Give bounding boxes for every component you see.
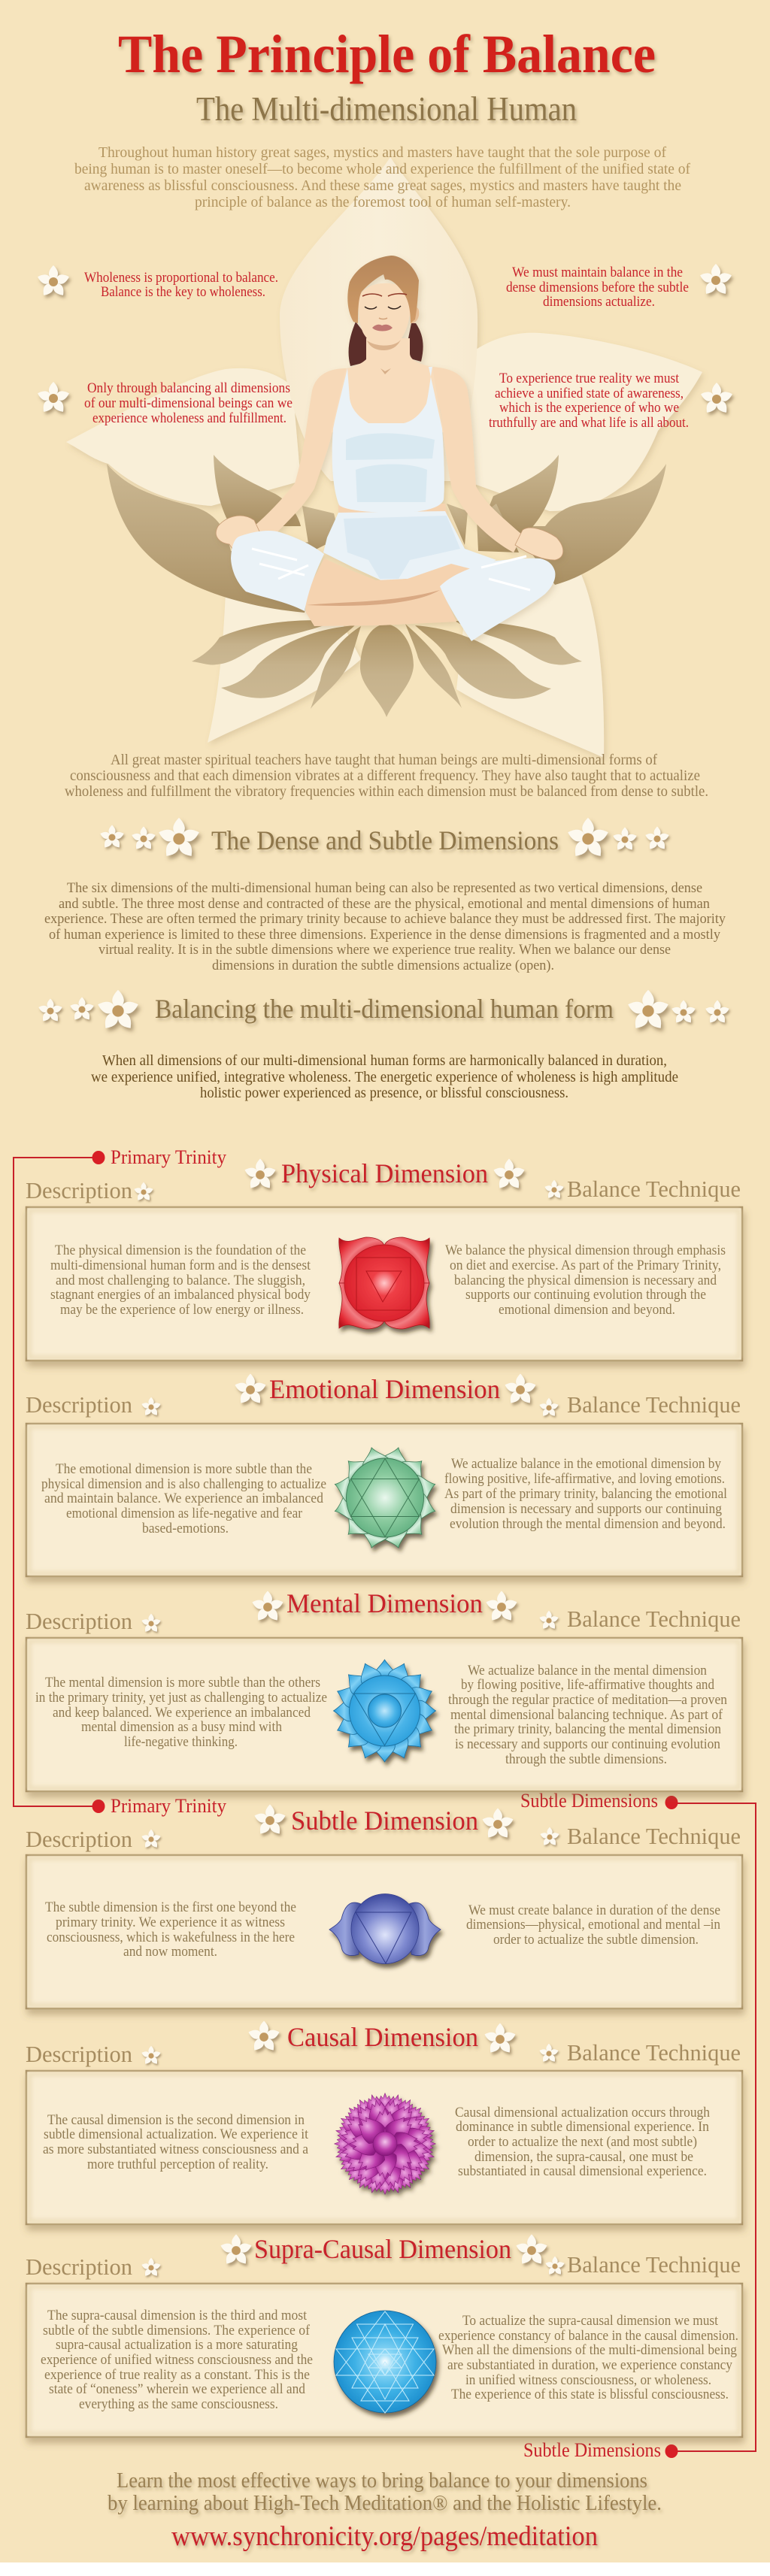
intro paragraph xyxy=(74,144,690,210)
description text: stagnant energies of an imbalanced physical body xyxy=(50,1288,311,1303)
intro paragraph: Throughout human history great sages, mystics and masters have taught that the sole purpose of xyxy=(99,144,666,161)
hands xyxy=(216,516,265,556)
box xyxy=(26,1424,742,1576)
icon: red root chakra xyxy=(339,1237,429,1329)
description text: state of “oneness” wherein we experience all and xyxy=(49,2382,306,2397)
balance technique label: Balance Technique xyxy=(567,1391,741,1418)
footer call to action: Learn the most effective ways to bring balance to your dimensions xyxy=(117,2469,647,2493)
technique text: supports our continuing evolution through the xyxy=(465,1288,706,1303)
paragraph: wholeness xyxy=(91,1053,678,1101)
description text xyxy=(41,2308,313,2412)
bracket: primary trinity: Primary Trinity xyxy=(111,1146,226,1168)
technique text xyxy=(448,1663,727,1767)
paragraph: six dimensions: of human experience is limited to these three dimensions. Experience in the dense dimensions is fragmented and a mostly xyxy=(49,927,720,943)
description text xyxy=(45,1900,296,1960)
heading: balancing with flowers: Balancing the multi-dimensional human form xyxy=(155,994,614,1024)
subtitle: The Multi-dimensional Human xyxy=(196,90,577,128)
technique text: by flowing positive, life-affirmative thoughts and xyxy=(461,1678,715,1693)
paragraph: six dimensions: The six dimensions of the multi-dimensional human being can also be represented as two vertical dimensions, dense xyxy=(67,880,702,896)
description label: Description xyxy=(26,1177,132,1203)
white legs xyxy=(231,531,324,611)
technique text xyxy=(455,2105,710,2179)
heading xyxy=(251,1588,518,1623)
technique text: We balance the physical dimension through emphasis xyxy=(445,1243,726,1258)
callout: maintain balance xyxy=(506,265,689,310)
technique text: Causal dimensional actualization occurs through xyxy=(455,2105,710,2120)
technique text: order to actualize the next (and most subtle) xyxy=(468,2135,697,2150)
bracket: primary trinity: Primary Trinity xyxy=(111,1795,226,1817)
paragraph: six dimensions xyxy=(44,880,726,973)
lower lotus petals xyxy=(192,620,582,717)
description text xyxy=(43,2113,309,2172)
footer call to action: by learning about High-Tech Meditation® and the Holistic Lifestyle. xyxy=(108,2491,662,2515)
balance technique label: Balance Technique xyxy=(567,1606,741,1632)
panel: causal dimension xyxy=(26,2021,742,2224)
icon: flower xyxy=(699,264,733,296)
dark lotus leaves behind figure xyxy=(107,455,666,613)
woman figure xyxy=(216,256,563,641)
technique text: dominance in subtle dimensional experience. In xyxy=(456,2120,709,2135)
box xyxy=(26,1207,742,1361)
technique text xyxy=(444,1457,727,1532)
technique text: dimension, the supra-causal, one must be xyxy=(474,2150,693,2165)
intro paragraph: awareness as blissful consciousness. And these same great sages, mystics and masters have taught the xyxy=(84,177,681,194)
heading: Emotional Dimension xyxy=(269,1374,500,1404)
description text: The causal dimension is the second dimension in xyxy=(47,2113,305,2128)
icon: magenta crown chakra xyxy=(334,2093,436,2195)
paragraph: six dimensions: virtual reality. It is in the subtle dimensions where we experience true reality. When we balance our dense xyxy=(99,942,671,958)
callout: true reality: achieve a unified state of awareness, xyxy=(495,386,684,401)
box xyxy=(26,2071,742,2224)
description text: experience of true reality as a constant. This is the xyxy=(44,2368,310,2383)
hair xyxy=(347,256,419,323)
technique text xyxy=(466,1903,720,1948)
icon: flower xyxy=(36,382,71,414)
technique text: We must create balance in duration of the dense xyxy=(468,1903,720,1918)
technique text xyxy=(438,2314,738,2402)
intro paragraph: principle of balance as the foremost tool of human self-mastery. xyxy=(195,194,571,210)
heading: dense and subtle with flowers xyxy=(99,818,670,859)
technique text: The experience of this state is blissful consciousness. xyxy=(451,2387,729,2402)
heading: Physical Dimension xyxy=(281,1158,488,1188)
box xyxy=(26,2284,742,2437)
callout: maintain balance: dimensions actualize. xyxy=(543,294,655,310)
icon: sri yantra xyxy=(334,2311,436,2413)
technique text: is necessary and supports our continuing evolution xyxy=(455,1737,720,1752)
description text: and most challenging to balance. The sluggish, xyxy=(56,1273,305,1288)
description text: subtle of the subtle dimensions. The experience of xyxy=(43,2323,311,2338)
paragraph: six dimensions: experience. These are often termed the primary trinity because to achieve balance they must be addressed first. The majority xyxy=(44,911,726,927)
description text: in the primary trinity, yet just as challenging to actualize xyxy=(35,1691,327,1706)
technique text: through the subtle dimensions. xyxy=(505,1752,667,1767)
description label: Description xyxy=(26,1608,132,1634)
description text: life-negative thinking. xyxy=(124,1735,238,1750)
callout: true reality xyxy=(489,371,689,431)
technique text: are substantiated in duration, we experience constancy xyxy=(447,2358,733,2373)
icon: indigo third eye chakra xyxy=(329,1894,441,1963)
box xyxy=(26,1855,742,2008)
description text: primary trinity. We experience it as witness xyxy=(56,1915,285,1930)
panel: subtle dimension xyxy=(26,1804,742,2008)
technique text: mental dimensional balancing technique. As part of xyxy=(450,1708,723,1723)
description text xyxy=(35,1675,327,1750)
description text: and maintain balance. We experience an imbalanced xyxy=(44,1491,324,1506)
heading xyxy=(247,2021,517,2055)
callout: maintain balance: dense dimensions before the subtle xyxy=(506,280,689,295)
description text: mental dimension as a busy mind with xyxy=(81,1720,282,1735)
technique text: order to actualize the subtle dimension. xyxy=(493,1933,699,1948)
paragraph: master teachers: All great master spiritual teachers have taught that human beings are multi-dimensional forms of xyxy=(111,752,657,768)
description text: physical dimension and is also challenging to actualize xyxy=(41,1477,326,1492)
technique text: We actualize balance in the mental dimension xyxy=(468,1663,707,1678)
technique text: the primary trinity, balancing the mental dimension xyxy=(454,1722,721,1737)
callout: wholeness xyxy=(84,270,278,300)
heading: Supra-Causal Dimension xyxy=(254,2234,511,2264)
description text: and keep balanced. We experience an imbalanced xyxy=(53,1706,311,1721)
icon: flower xyxy=(36,265,71,298)
box xyxy=(26,1638,742,1791)
heading: Mental Dimension xyxy=(286,1588,483,1618)
description text: and now moment. xyxy=(123,1945,217,1960)
callout: true reality: To experience true reality we must xyxy=(499,371,680,386)
description text: The physical dimension is the foundation of the xyxy=(55,1243,306,1258)
description text: The emotional dimension is more subtle than the xyxy=(56,1462,312,1477)
description text: emotional dimension as life-negative and fear xyxy=(66,1506,302,1521)
panel: physical dimension xyxy=(26,1158,742,1361)
paragraph: master teachers xyxy=(65,752,708,800)
paragraph: master teachers: consciousness and that each dimension vibrates at a different frequency. They have also taught that to actualize xyxy=(70,768,700,784)
callout: balancing all dimensions: experience wholeness and fulfillment. xyxy=(92,410,286,426)
description text: consciousness, which is wakefulness in the here xyxy=(47,1930,295,1945)
description text: experience of unified witness consciousness and the xyxy=(41,2353,313,2368)
technique text: through the regular practice of meditation—a proven xyxy=(448,1693,727,1708)
heading: balancing with flowers xyxy=(38,990,730,1031)
technique text: experience constancy of balance in the causal dimension. xyxy=(438,2329,738,2344)
description text: may be the experience of low energy or illness. xyxy=(60,1303,304,1318)
balance technique label: Balance Technique xyxy=(567,1823,741,1849)
callout: balancing all dimensions: of our multi-dimensional beings can we xyxy=(84,395,293,411)
description text: multi-dimensional human form and is the densest xyxy=(50,1258,311,1273)
callout: wholeness: Balance is the key to wholeness. xyxy=(101,284,265,300)
technique text: We actualize balance in the emotional dimension by xyxy=(451,1457,722,1472)
panel: emotional dimension xyxy=(26,1373,742,1576)
paragraph: wholeness: When all dimensions of our multi-dimensional human forms are harmonically balanced in duration, xyxy=(102,1053,667,1069)
footer call to action xyxy=(108,2469,662,2515)
heading: Causal Dimension xyxy=(287,2022,478,2052)
technique text: substantiated in causal dimensional experience. xyxy=(458,2164,707,2179)
description text: based-emotions. xyxy=(142,1521,229,1536)
technique text: dimension is necessary and supports our continuing xyxy=(450,1502,722,1517)
bracket: subtle dimensions xyxy=(520,1790,756,2461)
panel: supra-causal dimension xyxy=(26,2234,742,2437)
pants xyxy=(323,511,496,585)
description text xyxy=(41,1462,326,1536)
paragraph: six dimensions: and subtle. The three most dense and contracted of these are the physical, emotional and mental dimensions of human xyxy=(59,896,710,912)
technique text: flowing positive, life-affirmative, and loving emotions. xyxy=(444,1472,725,1487)
bracket: subtle dimensions: Subtle Dimensions xyxy=(523,2439,661,2461)
arms and chest xyxy=(254,368,350,545)
description label: Description xyxy=(26,1391,132,1418)
technique text: When all the dimensions of the multi-dimensional being xyxy=(442,2343,737,2358)
bracket: primary trinity xyxy=(14,1146,226,1817)
description text: as more substantiated witness consciousness and a xyxy=(43,2142,308,2157)
paragraph: wholeness: we experience unified, integrative wholeness. The energetic experience of wholeness is high amplitude xyxy=(91,1070,678,1085)
technique text: To actualize the supra-causal dimension we must xyxy=(462,2314,719,2329)
technique text: on diet and exercise. As part of the Primary Trinity, xyxy=(450,1258,721,1273)
face and neck xyxy=(359,283,411,348)
description text: The supra-causal dimension is the third and most xyxy=(47,2308,308,2323)
paragraph: master teachers: wholeness and fulfillment the vibratory frequencies within each dimension must be balanced from dense to subtle. xyxy=(65,784,708,800)
callout: wholeness: Wholeness is proportional to balance. xyxy=(84,270,278,286)
technique text: dimensions—physical, emotional and mental –in xyxy=(466,1918,720,1933)
paragraph: wholeness: holistic power experienced as presence, or blissful consciousness. xyxy=(200,1085,568,1101)
description text: The mental dimension is more subtle than the others xyxy=(45,1675,320,1691)
callout: balancing all dimensions xyxy=(84,380,293,426)
callout: maintain balance: We must maintain balance in the xyxy=(512,265,683,280)
description label: Description xyxy=(26,1826,132,1852)
description text: subtle dimensional actualization. We experience it xyxy=(44,2127,309,2142)
technique text: As part of the primary trinity, balancing the emotional xyxy=(444,1487,727,1502)
callout: balancing all dimensions: Only through balancing all dimensions xyxy=(87,380,290,396)
hair back xyxy=(349,322,423,366)
eyes, brows, nose, lips xyxy=(362,294,407,296)
title: The Principle of Balance xyxy=(118,24,656,84)
paragraph: six dimensions: dimensions in duration the subtle dimensions actualize (open). xyxy=(212,958,554,973)
crossed feet xyxy=(305,558,471,626)
icon: flower xyxy=(699,383,734,415)
footer url: www.synchronicity.org/pages/meditation xyxy=(171,2521,598,2552)
technique text: evolution through the mental dimension and beyond. xyxy=(450,1517,726,1532)
back petals xyxy=(66,157,702,758)
heading: Subtle Dimension xyxy=(291,1806,478,1836)
heading: dense and subtle with flowers: The Dense and Subtle Dimensions xyxy=(211,825,559,855)
callout: true reality: truthfully are and what life is all about. xyxy=(489,415,689,431)
callout: true reality: which is the experience of who we xyxy=(499,400,679,416)
technique text xyxy=(445,1243,726,1318)
description text: The subtle dimension is the first one beyond the xyxy=(45,1900,296,1915)
description label: Description xyxy=(26,2041,132,2067)
intro paragraph: being human is to master oneself—to become whole and experience the fulfillment of the unified state of xyxy=(74,161,690,177)
technique text: balancing the physical dimension is necessary and xyxy=(454,1273,717,1288)
balance technique label: Balance Technique xyxy=(567,1176,741,1202)
tank top xyxy=(332,367,444,513)
icon: blue throat chakra xyxy=(333,1660,436,1762)
icon: green heart chakra xyxy=(331,1444,439,1551)
description text: more truthful perception of reality. xyxy=(87,2157,268,2172)
illustration: meditating woman on lotus xyxy=(66,157,702,758)
panel: mental dimension xyxy=(26,1588,742,1791)
heading xyxy=(253,1804,514,1840)
balance technique label: Balance Technique xyxy=(567,2039,741,2066)
technique text: emotional dimension and beyond. xyxy=(499,1303,675,1318)
bracket: subtle dimensions: Subtle Dimensions xyxy=(520,1790,658,1812)
description text: supra-causal actualization is a more saturating xyxy=(56,2338,298,2353)
technique text: in unified witness consciousness, or wholeness. xyxy=(465,2373,711,2388)
description text xyxy=(50,1243,311,1318)
description text: everything as the same consciousness. xyxy=(79,2397,278,2412)
description label: Description xyxy=(26,2254,132,2280)
balance technique label: Balance Technique xyxy=(567,2251,741,2278)
